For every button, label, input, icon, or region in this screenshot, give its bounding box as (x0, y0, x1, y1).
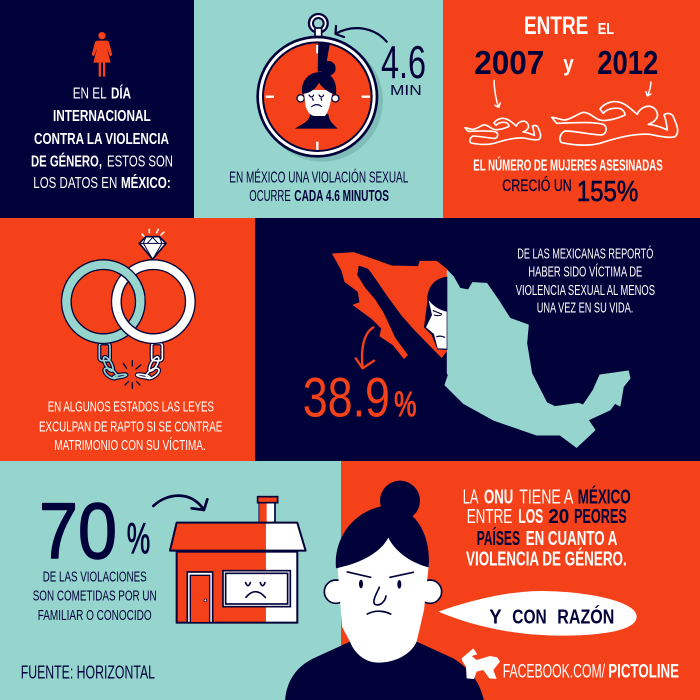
stopwatch caption: EN MÉXICO UNA VIOLACIÓN SEXUAL (229, 167, 408, 186)
speech bubble: CON (512, 606, 547, 628)
icon: body outline large (552, 102, 678, 145)
UN statement: LOS (518, 506, 543, 528)
rings caption: MATRIMONIO CON SU VÍCTIMA. (54, 437, 206, 454)
arrow to stopwatch (336, 26, 387, 42)
UN statement: PEORES (574, 506, 627, 528)
stopwatch caption: CADA 4.6 MINUTOS (294, 188, 389, 205)
panel: map of Mexico (255, 218, 700, 461)
UN statement: ENTRE (467, 506, 512, 528)
icon: broken chains (99, 343, 162, 388)
family violence caption: DE LAS VIOLACIONES (43, 570, 147, 586)
map caption: HABER SIDO VÍCTIMA DE (528, 264, 643, 281)
UN statement: EN CUANTO A (526, 528, 617, 550)
family violence caption (33, 570, 157, 624)
woman in profile (424, 277, 447, 350)
statistic: 70%: % (127, 514, 150, 563)
label: 4.6 min (381, 36, 426, 99)
femicide statistic (473, 157, 663, 208)
icon: stopwatch with woman (256, 14, 383, 162)
UN statement: TIENE A (519, 486, 574, 508)
angry woman (285, 481, 484, 700)
intro text: DÍA (111, 83, 131, 102)
map caption (516, 245, 655, 316)
panel: UN ranking (285, 461, 700, 700)
femicide statistic: CRECIÓ UN (502, 176, 572, 195)
arrow to percentage (356, 327, 374, 368)
stopwatch caption: OCURRE (249, 188, 291, 205)
intro text (31, 83, 173, 192)
years: 2007 (474, 44, 544, 81)
family violence caption: SON COMETIDAS POR UN (33, 589, 157, 605)
intro text: INTERNACIONAL (53, 108, 151, 125)
arrow to house (153, 496, 207, 510)
stopwatch caption (229, 167, 408, 205)
map caption: UNA VEZ EN SU VIDA. (537, 300, 633, 316)
label: 4.6 min: 4.6 (381, 36, 426, 88)
UN statement: MÉXICO (578, 485, 631, 508)
years: 2012 (597, 44, 658, 81)
UN statement: PAÍSES (477, 527, 520, 550)
UN statement: 20 (548, 506, 569, 528)
heading: entre el: ENTRE (524, 12, 588, 40)
facebook link: FACEBOOK.COM/ (503, 662, 605, 683)
intro text: MÉXICO: (121, 173, 171, 192)
label: 4.6 min: MIN (390, 82, 422, 99)
panel: femicides 2007 to 2012 (443, 0, 700, 218)
intro text: ESTOS SON (107, 154, 173, 171)
femicide statistic: 155% (577, 176, 638, 208)
rings caption (39, 399, 222, 454)
statistic: 38.9%: % (394, 384, 417, 425)
rings caption: EXCULPAN DE RAPTO SI SE CONTRAE (39, 419, 222, 436)
panel: family violence (0, 461, 341, 700)
icon: woman (92, 32, 112, 77)
statistic: 70%: 70 (39, 486, 117, 575)
icon: sad house (170, 497, 306, 623)
panel: introduction (0, 0, 194, 218)
intro text: DE GÉNERO, (31, 152, 102, 171)
panel: rings and handcuffs (0, 218, 255, 461)
intro text: LOS DATOS EN (33, 175, 117, 192)
rings caption: EN ALGUNOS ESTADOS LAS LEYES (48, 399, 214, 416)
intro text: EN EL (73, 85, 107, 102)
statistic: 38.9%: 38.9 (303, 366, 390, 429)
family violence caption: FAMILIAR O CONOCIDO (38, 608, 152, 624)
source: FUENTE: HORIZONTAL (21, 662, 155, 682)
UN statement: ONU (484, 486, 513, 508)
years (474, 44, 658, 81)
map: rest of Mexico in teal (445, 271, 630, 447)
panel: stopwatch (194, 0, 443, 218)
speech bubble: Y (489, 606, 502, 628)
years: y (563, 51, 574, 76)
UN statement: VIOLENCIA DE GÉNERO. (466, 548, 627, 571)
speech bubble (438, 591, 637, 636)
icon: body outline small (465, 118, 541, 144)
arrows to bodies (494, 80, 651, 107)
intro text: CONTRA LA VIOLENCIA (34, 131, 169, 148)
UN statement (463, 485, 631, 571)
map: northwest Mexico in orange (333, 253, 447, 358)
icon: ring handcuffs (66, 229, 190, 339)
UN statement: LA (463, 486, 479, 508)
heading: entre el: EL (598, 21, 614, 38)
speech bubble: RAZÓN (557, 604, 614, 628)
logo: pig icon (462, 648, 500, 679)
